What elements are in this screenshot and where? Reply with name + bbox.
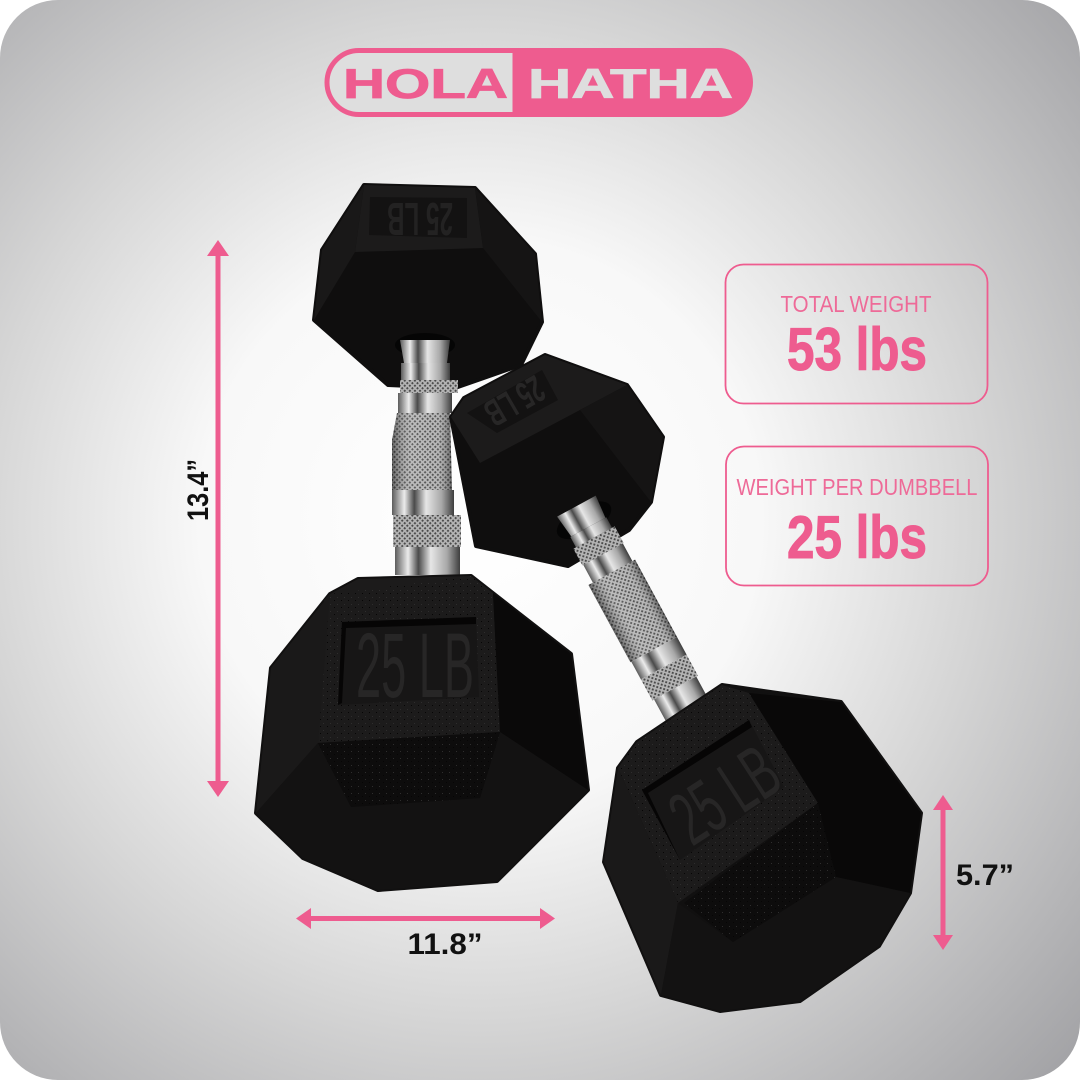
total weight value: 53 lbs <box>787 316 927 383</box>
label: 11.8 in: 11.8” <box>408 928 482 961</box>
panel: total weight <box>726 264 988 404</box>
label: 13.4 in: 13.4” <box>182 459 215 521</box>
bottom hexagonal head <box>604 685 921 1011</box>
head engraving: 25 LB <box>477 367 551 434</box>
bottom hexagonal head <box>256 576 588 890</box>
head engraving: 25 LB <box>655 729 795 861</box>
chrome handle <box>392 333 461 575</box>
head engraving: 25 LB <box>387 193 453 245</box>
logo: right filled half <box>513 48 753 117</box>
arrow: height 13.4 in <box>207 240 229 797</box>
dumbbell: left upright <box>256 185 588 890</box>
total weight label: TOTAL WEIGHT <box>780 291 932 317</box>
logo: HATHA wordmark: HATHA <box>528 60 733 107</box>
dumbbell: right tilted <box>451 355 921 1011</box>
logo <box>327 48 753 117</box>
logo: left outlined half <box>327 50 515 114</box>
top hexagonal head <box>451 355 663 566</box>
arrow: width 11.8 in <box>296 908 555 929</box>
label: 5.7 in: 5.7” <box>956 859 1014 892</box>
arrow: diameter 5.7 in <box>933 795 953 950</box>
panel: weight per dumbbell <box>726 446 988 586</box>
chrome handle <box>550 492 717 731</box>
logo: HOLA wordmark: HOLA <box>343 60 508 107</box>
weight per dumbbell label: WEIGHT PER DUMBBELL <box>736 474 978 500</box>
top hexagonal head <box>314 185 542 388</box>
weight per dumbbell value: 25 lbs <box>787 504 927 571</box>
bottom hexagonal head: 25 LB <box>356 615 474 717</box>
